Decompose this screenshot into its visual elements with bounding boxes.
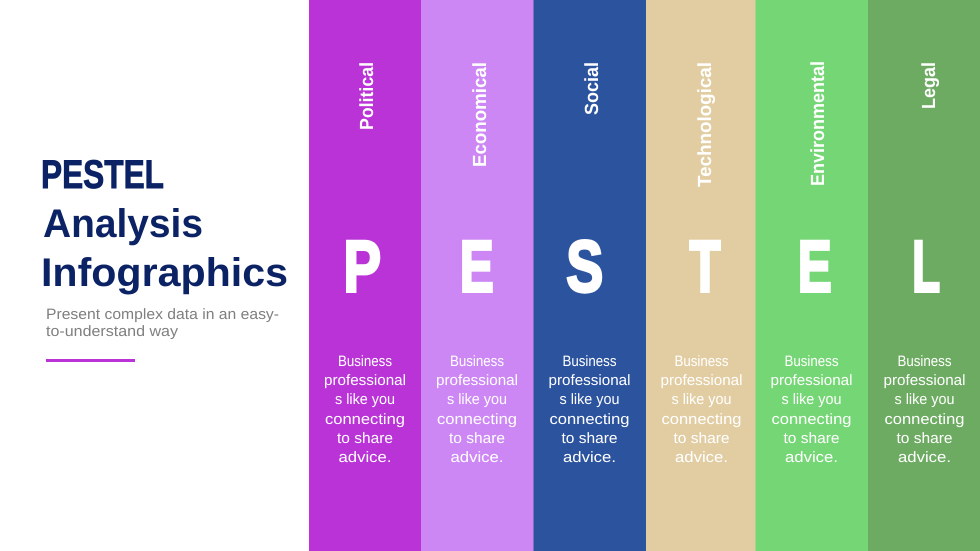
description: Business [784, 353, 838, 370]
description: s like you [782, 391, 842, 408]
description [884, 353, 966, 466]
description: to share [896, 430, 952, 447]
description: advice. [338, 449, 392, 466]
description: s like you [335, 391, 395, 408]
panel: environmental [756, 0, 868, 551]
subtitle text: Present complex data in an easy- [46, 306, 279, 323]
description: professional [548, 372, 630, 389]
description: Business [450, 353, 504, 370]
description: Business [338, 353, 392, 370]
description: advice. [785, 449, 838, 466]
description: to share [449, 430, 505, 447]
panel: technological [646, 0, 756, 551]
title: PESTEL [41, 153, 164, 197]
letter L: L [912, 226, 940, 308]
description: connecting [437, 411, 517, 428]
letter E: E [460, 226, 494, 308]
description: advice. [898, 449, 951, 466]
description: s like you [672, 391, 732, 408]
label: technological: Technological [695, 62, 716, 187]
description: professional [884, 372, 966, 389]
panel: legal [868, 0, 980, 551]
description: advice. [450, 449, 504, 466]
description: to share [337, 430, 393, 447]
description: s like you [560, 391, 620, 408]
description: s like you [447, 391, 507, 408]
description: connecting [884, 411, 964, 428]
panel: economical [421, 0, 534, 551]
description: s like you [894, 391, 954, 408]
description: to share [784, 430, 840, 447]
letter S: S [566, 226, 603, 308]
letter E: E [798, 226, 832, 308]
description [324, 353, 406, 466]
subtitle text [46, 306, 279, 340]
description: connecting [662, 411, 742, 428]
description: Business [562, 353, 616, 370]
description [548, 353, 630, 466]
description: connecting [325, 411, 405, 428]
panel: social [534, 0, 646, 551]
subtitle text: to-understand way [46, 323, 179, 340]
letter T: T [690, 226, 720, 308]
description: professional [324, 372, 406, 389]
description [770, 353, 852, 466]
description [436, 353, 518, 466]
description: professional [660, 372, 742, 389]
description: professional [770, 372, 852, 389]
label: environmental: Environmental [808, 61, 829, 186]
description: to share [674, 430, 730, 447]
description [660, 353, 742, 466]
description: connecting [772, 411, 852, 428]
description: to share [562, 430, 618, 447]
letter P: P [343, 226, 381, 308]
description: advice. [675, 449, 728, 466]
title [41, 153, 288, 295]
label: economical: Economical [470, 62, 491, 167]
description: connecting [550, 411, 630, 428]
description: Business [674, 353, 728, 370]
accent line [46, 359, 135, 362]
panel: political [309, 0, 421, 551]
label: political: Political [357, 62, 378, 130]
title: Analysis [43, 202, 203, 246]
description: professional [436, 372, 518, 389]
label: legal: Legal [919, 62, 940, 109]
description: advice. [563, 449, 616, 466]
title: Infographics [41, 251, 288, 295]
description: Business [898, 353, 952, 370]
label: social: Social [582, 62, 603, 115]
